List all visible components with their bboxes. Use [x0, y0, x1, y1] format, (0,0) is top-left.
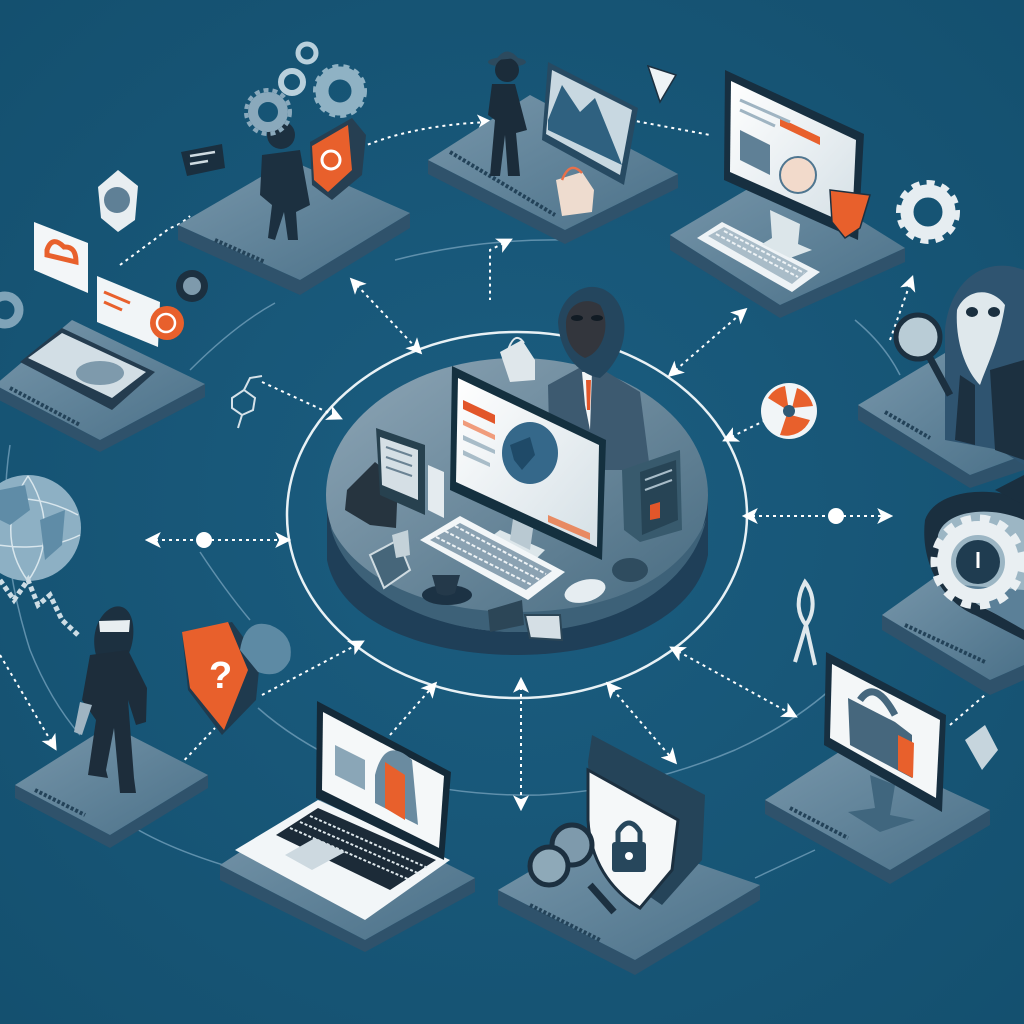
central platform	[326, 287, 708, 655]
bag	[500, 338, 535, 382]
orange question shield	[182, 622, 260, 735]
magnifier	[896, 315, 950, 395]
radial orange badge	[761, 383, 817, 439]
gears cluster	[246, 44, 365, 134]
mouse	[562, 575, 608, 607]
hooded figure	[548, 287, 650, 470]
orange shield	[310, 118, 366, 200]
padlock gear device	[924, 475, 1024, 640]
desk items	[370, 530, 648, 640]
laptop	[235, 701, 451, 920]
stand	[762, 210, 812, 258]
platform: top-center	[428, 51, 678, 244]
coffee cup	[422, 575, 472, 605]
cloud card icon	[34, 222, 88, 293]
network arrows	[0, 120, 985, 808]
stand	[848, 775, 915, 832]
figure at shield	[260, 121, 310, 240]
monitor	[824, 652, 946, 812]
document card with coin	[97, 276, 184, 347]
platform: left document	[0, 320, 205, 452]
right book	[622, 450, 682, 542]
globe	[0, 475, 81, 635]
security shield	[588, 735, 705, 908]
open tablet	[20, 328, 155, 410]
magnifiers	[530, 825, 614, 912]
main monitor	[450, 366, 606, 565]
platform: laptop	[220, 701, 475, 952]
platform: bottom-left figure	[15, 606, 208, 848]
cloud outline behind shield	[240, 624, 291, 674]
outer orbit lines	[6, 240, 900, 878]
small lock tag	[965, 725, 998, 770]
central ring	[287, 332, 747, 698]
node dots	[196, 508, 844, 548]
gear right	[899, 183, 957, 241]
spy figure with hat	[488, 51, 527, 176]
alien hooded figure	[945, 266, 1024, 465]
ribbon icon	[795, 582, 815, 665]
platform: right gears	[882, 475, 1024, 695]
platform: top-right monitor	[670, 70, 905, 318]
gear left edge	[0, 296, 19, 324]
chart panel	[542, 62, 638, 185]
platform: right hooded figure	[858, 266, 1024, 488]
orange question shield: ?	[209, 655, 232, 697]
monitor	[724, 70, 870, 240]
masked figure	[74, 606, 147, 793]
molecule icon	[232, 376, 262, 428]
small dark gear badge	[176, 270, 208, 302]
hexagon badge icon	[98, 170, 138, 232]
small device icon	[181, 144, 225, 176]
platform: shield and magnifier	[498, 735, 760, 975]
platform: top-left gears	[178, 118, 410, 295]
keyboard	[420, 516, 565, 600]
platform: right monitor	[765, 652, 990, 884]
left folders	[345, 428, 444, 528]
keyboard	[697, 222, 820, 292]
shopping bag	[556, 168, 594, 216]
envelope icon	[648, 66, 676, 102]
